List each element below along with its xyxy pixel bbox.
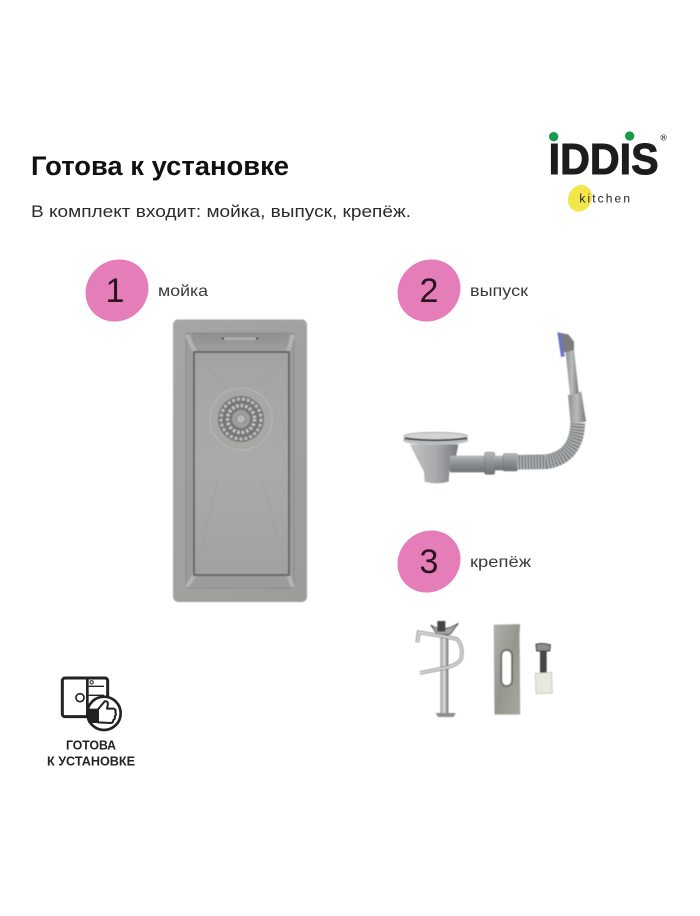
icon sink box — [62, 678, 108, 717]
badge 3: 3 — [420, 543, 438, 581]
badge 1: 1 — [106, 272, 124, 310]
logo registered mark: ® — [660, 132, 667, 142]
drain outlet photo — [403, 332, 586, 483]
logo green dots — [549, 131, 634, 141]
icon caption: К УСТАНОВКЕ — [47, 754, 135, 768]
outlet blue seal — [557, 332, 565, 357]
label: мойка: мойка — [158, 283, 208, 300]
outlet hose coupling — [568, 392, 586, 424]
outlet strainer flange — [403, 436, 468, 445]
label: крепёж: крепёж — [470, 554, 531, 571]
badge 2 — [385, 247, 473, 334]
subtitle: В комплект входит: мойка, выпуск, крепёж. — [31, 202, 411, 221]
logo wordmark: IDDIS — [549, 136, 659, 184]
icon caption — [47, 738, 135, 768]
outlet overflow head — [558, 332, 574, 357]
clamp plate — [494, 624, 520, 714]
logo: IDDIS kitchen — [549, 131, 667, 216]
outlet thin overflow tube — [565, 349, 579, 394]
icon: ready to install — [62, 678, 121, 730]
outlet cone body — [410, 444, 458, 483]
sink bowl — [186, 333, 294, 588]
overflow slot — [222, 337, 258, 340]
icon thumbs-up badge — [87, 697, 121, 730]
title: Готова к установке — [31, 151, 289, 181]
clamp bolt — [417, 621, 462, 717]
screw with plastic sleeve — [535, 643, 552, 694]
logo kitchen word: kitchen — [579, 192, 630, 206]
drain strainer — [210, 388, 272, 450]
sink rim — [173, 320, 307, 602]
logo yellow blob — [564, 181, 596, 216]
badge 3 — [385, 518, 473, 605]
outlet corrugated hose — [517, 423, 578, 462]
outlet horizontal pipe — [450, 456, 487, 472]
badge 2: 2 — [420, 272, 438, 310]
fasteners photo — [417, 621, 552, 717]
badge 1 — [73, 247, 161, 334]
icon caption: ГОТОВА — [66, 738, 116, 752]
label: выпуск: выпуск — [470, 283, 529, 300]
sink photo — [173, 320, 307, 602]
outlet nut — [485, 452, 495, 474]
